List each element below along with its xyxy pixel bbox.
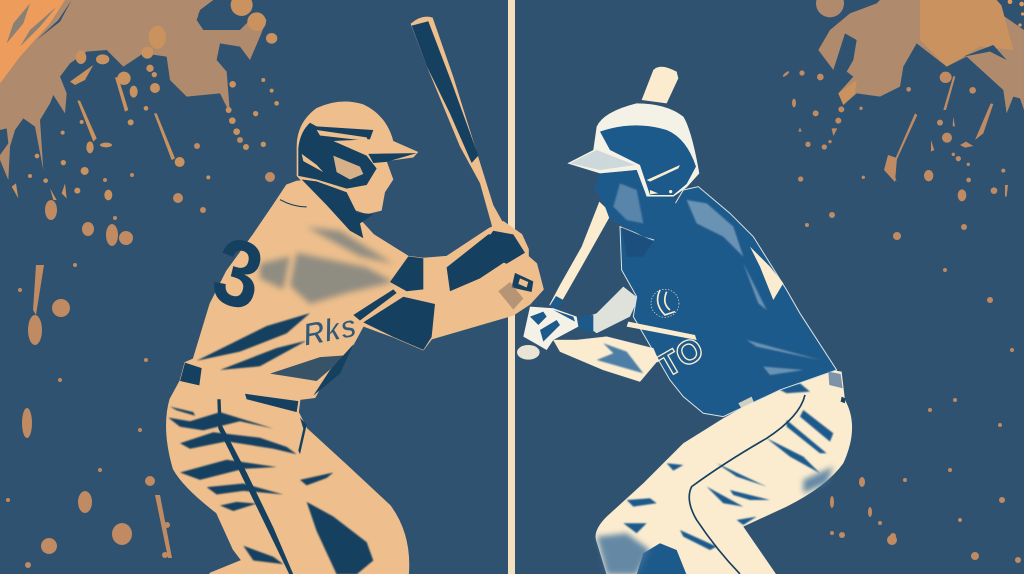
right batter: jersey bbox=[620, 187, 837, 417]
left batter bbox=[167, 101, 543, 574]
right batter: helmet vents bbox=[647, 165, 680, 194]
left batter: helmet shadow bbox=[298, 123, 377, 189]
right batter: belt loop details bbox=[738, 397, 755, 412]
left batter: pants piping bbox=[217, 399, 293, 574]
left batter: pants folds bbox=[168, 407, 333, 564]
left batter: jersey and pants silhouette bbox=[167, 179, 543, 574]
left batter: dark lower sleeve bbox=[363, 297, 435, 350]
right batter: inner leg shadow bbox=[637, 543, 687, 574]
right bat lower section bbox=[549, 202, 612, 310]
right batter: back arm bbox=[578, 287, 638, 333]
left batter: belt bbox=[180, 363, 202, 385]
splatter: top right bbox=[782, 0, 1024, 201]
right batter: bat knob bbox=[517, 345, 540, 360]
left batter: helmet and face bbox=[297, 101, 418, 214]
left batter: dark forearm sleeve bbox=[447, 234, 513, 291]
left bat bbox=[411, 17, 507, 231]
right batter: jersey lettering: TO bbox=[652, 330, 710, 385]
right batter: face bbox=[594, 170, 677, 240]
right batter: wristband bbox=[578, 315, 593, 333]
left batter: neck shadow bbox=[302, 179, 373, 238]
divider line bbox=[508, 0, 515, 574]
splatter: right scattered drops bbox=[805, 155, 1021, 563]
right batter: pants folds bbox=[623, 383, 833, 550]
right batter: helmet bbox=[567, 103, 699, 197]
left batter: jersey soft shadows bbox=[260, 227, 393, 304]
right batter: sleeve logo bbox=[651, 289, 679, 317]
right batter: pants bbox=[596, 369, 852, 574]
splatter: top left bbox=[0, 0, 279, 200]
right batter: back number bbox=[750, 247, 783, 300]
right batter: front arm bbox=[553, 337, 658, 382]
right batter: glove bbox=[523, 307, 578, 350]
right bat top section bbox=[642, 67, 678, 103]
left batter: outline accent bbox=[280, 200, 393, 319]
right batter: pants piping bbox=[689, 395, 805, 574]
right batter: thigh highlights bbox=[597, 467, 833, 574]
left batter: jersey script: Rks bbox=[300, 307, 359, 353]
splatter: left scattered drops bbox=[6, 137, 275, 568]
right batter: collar bbox=[622, 227, 653, 257]
right batter bbox=[517, 103, 852, 574]
right batter: sleeve stripes bbox=[627, 322, 697, 340]
left batter: top hand fingers bbox=[485, 231, 525, 264]
right batter: jersey shading bbox=[687, 200, 820, 375]
left batter: back number: 3 bbox=[204, 216, 273, 331]
left batter: jersey folds bbox=[197, 313, 310, 361]
left batter: lower hand glove overlap bbox=[497, 258, 543, 315]
left batter: dark upper band bbox=[390, 256, 423, 291]
